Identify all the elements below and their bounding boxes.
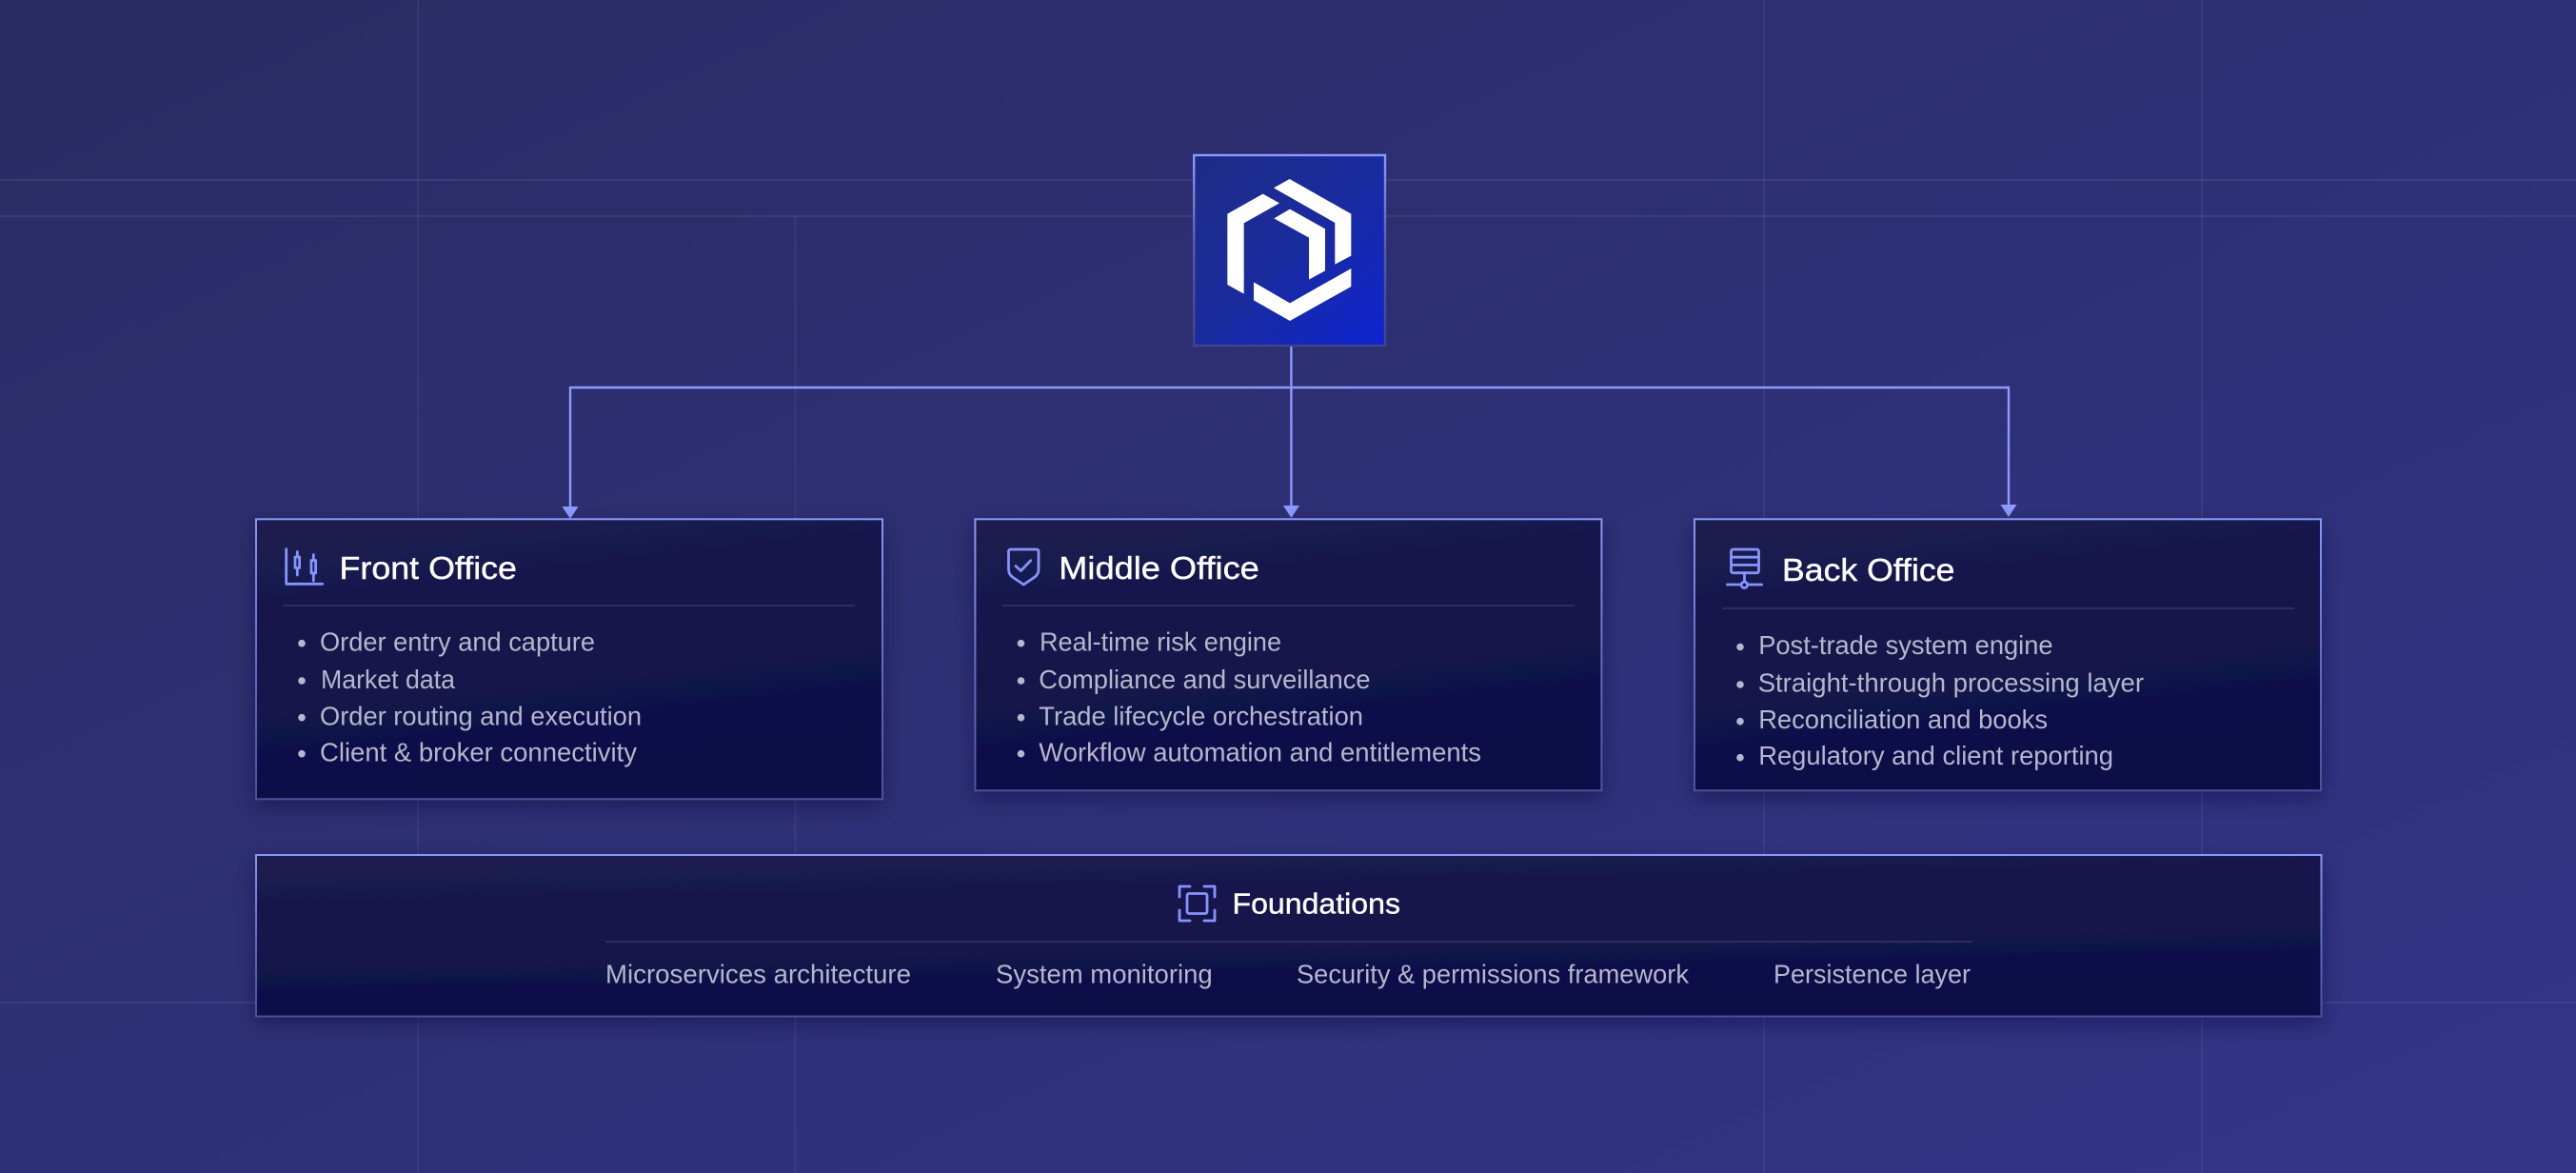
panel: Back Office [1694, 519, 2321, 790]
list: Front Office items: Order entry and capture [320, 626, 595, 657]
heading: Foundations: Foundations [1232, 887, 1400, 920]
list: Foundations items [605, 960, 1971, 988]
list: Middle Office items: Compliance and surveillance [1039, 665, 1371, 694]
list: Front Office items: Order routing and execution [320, 701, 642, 731]
list: Middle Office items [1018, 626, 1481, 767]
icon: framed square [1179, 886, 1215, 921]
list: Middle Office items: Trade lifecycle orchestration [1039, 701, 1363, 731]
list: Foundations items: System monitoring [996, 960, 1213, 988]
list: Back Office items: Post-trade system engine [1758, 630, 2053, 660]
list: Middle Office items: Workflow automation and entitlements [1039, 737, 1481, 767]
connector arrows from logo to the three offices [562, 347, 2016, 519]
list: Back Office items: Regulatory and client reporting [1758, 741, 2113, 770]
logo tile [1194, 155, 1385, 346]
panel: Foundations [256, 855, 2321, 1017]
icon: candlestick chart [287, 549, 323, 584]
heading: Back Office: Back Office [1782, 552, 1955, 587]
panel: Middle Office [975, 519, 1601, 790]
list: Middle Office items: Real-time risk engine [1040, 626, 1281, 657]
list: Front Office items: Client & broker connectivity [320, 737, 637, 767]
icon: networked server [1727, 549, 1762, 588]
heading: Front Office: Front Office [339, 550, 517, 586]
panel: Front Office [256, 519, 882, 799]
list: Back Office items [1736, 630, 2144, 770]
icon: shield with check [1009, 549, 1039, 585]
list: Foundations items: Microservices architecture [605, 960, 911, 988]
list: Foundations items: Security & permissions framework [1297, 960, 1689, 988]
list: Foundations items: Persistence layer [1773, 960, 1971, 988]
heading: Middle Office: Middle Office [1059, 550, 1259, 586]
list: Front Office items [298, 626, 642, 767]
list: Back Office items: Reconciliation and books [1758, 705, 2048, 734]
list: Back Office items: Straight-through processing layer [1758, 668, 2144, 697]
list: Front Office items: Market data [321, 665, 456, 694]
icon: hexagonal cube logo [1227, 179, 1351, 321]
